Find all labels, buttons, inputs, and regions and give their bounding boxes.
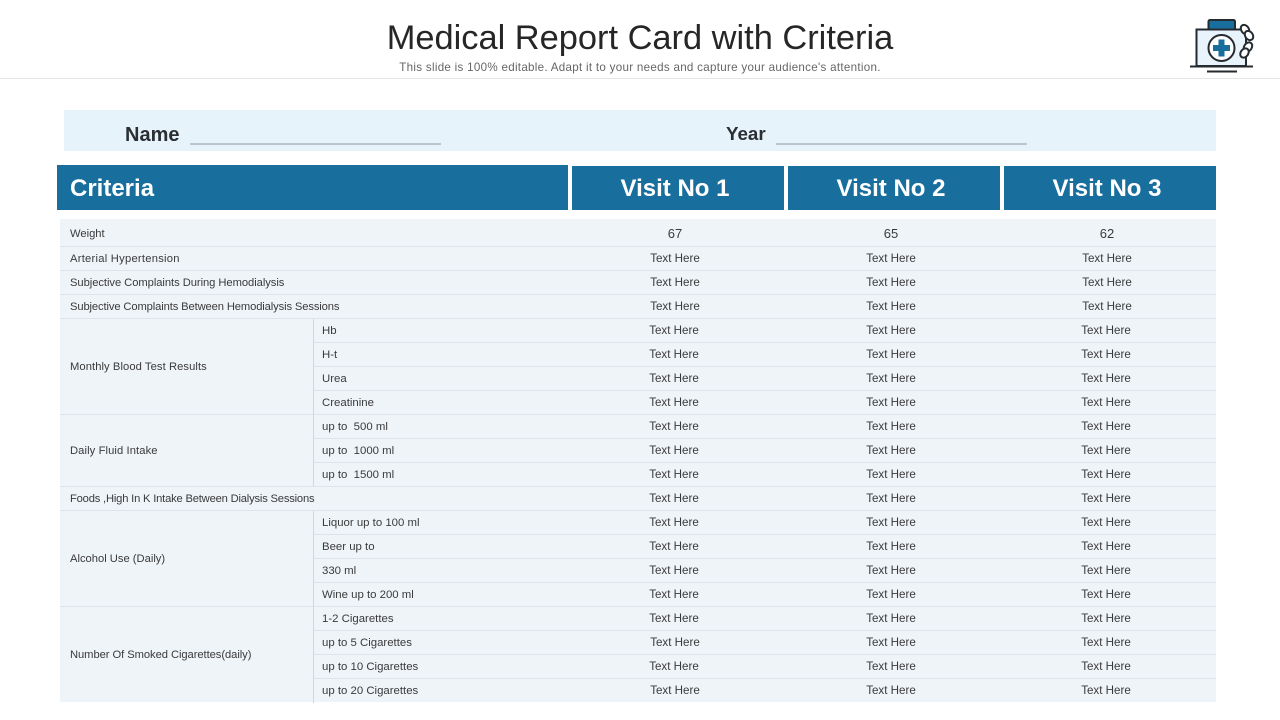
- row: wine: [314, 583, 1216, 607]
- row: liquor: Liquor up to 100 ml: [322, 517, 420, 529]
- row: up to 500 ml: Text Here: [649, 420, 699, 433]
- group label: daily fluid intake: [60, 415, 314, 487]
- criteria table: [60, 219, 1216, 702]
- row: foods high in k: Text Here: [1081, 492, 1131, 505]
- row: weight: [60, 219, 1216, 247]
- row: up to 10 cigarettes: [314, 655, 1216, 679]
- header: visit no 1: [572, 166, 784, 210]
- row: 330 ml: Text Here: [866, 564, 916, 577]
- year label: Year: [726, 123, 766, 144]
- row: arterial hypertension: Text Here: [1082, 252, 1132, 265]
- row: h-t: H-t: [322, 349, 337, 361]
- row: up to 500 ml: up to 500 ml: [322, 421, 388, 433]
- row: up to 500 ml: [314, 415, 1216, 439]
- subtitle: This slide is 100% editable. Adapt it to your needs and capture your audience's attention.: [399, 61, 881, 74]
- group label: monthly blood test results: [60, 319, 314, 415]
- row: up to 20 cigarettes: [322, 684, 1131, 697]
- row: up to 1500 ml: [314, 463, 1216, 487]
- header: criteria: [57, 165, 568, 210]
- row: up to 5 cigarettes: Text Here: [650, 636, 700, 649]
- row: complaints during hemodialysis: Text Here: [866, 276, 916, 289]
- row: foods high in k: [60, 487, 1216, 511]
- row: 330 ml: Text Here: [1081, 564, 1131, 577]
- year input line: [776, 143, 1027, 145]
- row: 1-2 cigarettes: [314, 607, 1216, 631]
- header: visit no 1: Visit No 1: [621, 175, 729, 202]
- row: complaints between sessions: Subjective Complaints Between Hemodialysis Sessions: [70, 301, 339, 313]
- header: visit no 2: [788, 166, 1000, 210]
- row: up to 1000 ml: Text Here: [649, 444, 699, 457]
- row: wine: Text Here: [866, 588, 916, 601]
- row: weight: 62: [1100, 226, 1114, 241]
- row: creatinine: [314, 391, 1216, 415]
- row: 1-2 cigarettes: 1-2 Cigarettes: [322, 613, 394, 625]
- row: creatinine: Text Here: [649, 396, 699, 409]
- row: complaints between sessions: [60, 295, 1216, 319]
- row: urea: Urea: [322, 373, 347, 385]
- group label: smoked cigarettes: [60, 607, 314, 703]
- row: up to 20 cigarettes: Text Here: [1081, 684, 1131, 697]
- row: up to 5 cigarettes: up to 5 Cigarettes: [322, 637, 412, 649]
- row: up to 1500 ml: Text Here: [649, 468, 699, 481]
- row: up to 5 cigarettes: Text Here: [866, 636, 916, 649]
- row: hb: Text Here: [866, 324, 916, 337]
- group label: smoked cigarettes: Number Of Smoked Cigarettes(daily): [70, 649, 251, 661]
- row: beer: Text Here: [866, 540, 916, 553]
- row: creatinine: Text Here: [866, 396, 916, 409]
- row: liquor: [314, 511, 1216, 535]
- row: up to 1500 ml: Text Here: [1081, 468, 1131, 481]
- row: up to 1500 ml: Text Here: [866, 468, 916, 481]
- header: criteria: Criteria: [70, 175, 154, 202]
- row: 330 ml: Text Here: [649, 564, 699, 577]
- row: weight: 67: [668, 226, 682, 241]
- row: hb: Text Here: [649, 324, 699, 337]
- row: foods high in k: Text Here: [649, 492, 699, 505]
- row: up to 20 cigarettes: Text Here: [866, 684, 916, 697]
- row: up to 500 ml: Text Here: [866, 420, 916, 433]
- row: complaints between sessions: Text Here: [866, 300, 916, 313]
- header: visit no 3: Visit No 3: [1053, 175, 1161, 202]
- row: weight: Weight: [70, 228, 105, 240]
- row: up to 10 cigarettes: Text Here: [649, 660, 699, 673]
- row: urea: Text Here: [866, 372, 916, 385]
- row: up to 1000 ml: up to 1000 ml: [322, 445, 394, 457]
- row: 1-2 cigarettes: Text Here: [1081, 612, 1131, 625]
- row: h-t: Text Here: [649, 348, 699, 361]
- row: urea: Text Here: [649, 372, 699, 385]
- row: beer: Beer up to: [322, 541, 375, 553]
- row: arterial hypertension: [60, 247, 1216, 271]
- row: beer: Text Here: [1081, 540, 1131, 553]
- row: wine: Text Here: [1081, 588, 1131, 601]
- group label: alcohol use: [60, 511, 314, 607]
- row: up to 1000 ml: [314, 439, 1216, 463]
- row: h-t: Text Here: [866, 348, 916, 361]
- row: up to 20 cigarettes: up to 20 Cigarettes: [322, 685, 418, 697]
- row: up to 1000 ml: Text Here: [866, 444, 916, 457]
- row: arterial hypertension: Text Here: [866, 252, 916, 265]
- row: complaints during hemodialysis: Text Here: [650, 276, 700, 289]
- row: weight: 65: [884, 226, 898, 241]
- row: up to 10 cigarettes: up to 10 Cigarettes: [322, 661, 418, 673]
- row: hb: Hb: [322, 325, 337, 337]
- row: h-t: Text Here: [1081, 348, 1131, 361]
- row: up to 1500 ml: up to 1500 ml: [322, 469, 394, 481]
- row: urea: Text Here: [1081, 372, 1131, 385]
- row: liquor: Text Here: [1081, 516, 1131, 529]
- row: 1-2 cigarettes: Text Here: [866, 612, 916, 625]
- group label: alcohol use: Alcohol Use (Daily): [70, 553, 165, 565]
- group label: monthly blood test results: Monthly Blood Test Results: [70, 361, 207, 373]
- name input line: [190, 143, 441, 145]
- row: hb: [314, 319, 1216, 343]
- row: complaints during hemodialysis: Subjective Complaints During Hemodialysis: [70, 277, 284, 289]
- row: beer: [314, 535, 1216, 559]
- row: arterial hypertension: Arterial Hypertension: [70, 253, 180, 265]
- row: up to 500 ml: Text Here: [1081, 420, 1131, 433]
- name and year band: [64, 110, 1216, 151]
- row: up to 1000 ml: Text Here: [1081, 444, 1131, 457]
- row: h-t: [314, 343, 1216, 367]
- icon: medical case: [1190, 19, 1254, 72]
- row: liquor: Text Here: [649, 516, 699, 529]
- row: wine: Wine up to 200 ml: [322, 589, 414, 601]
- row: foods high in k: Text Here: [866, 492, 916, 505]
- row: complaints between sessions: Text Here: [1082, 300, 1132, 313]
- row: creatinine: Text Here: [1081, 396, 1131, 409]
- row: up to 10 cigarettes: Text Here: [866, 660, 916, 673]
- header: visit no 2: Visit No 2: [837, 175, 945, 202]
- row: creatinine: Creatinine: [322, 397, 374, 409]
- row: 330 ml: 330 ml: [322, 565, 356, 577]
- row: beer: Text Here: [649, 540, 699, 553]
- row: complaints during hemodialysis: [60, 271, 1216, 295]
- group label: daily fluid intake: Daily Fluid Intake: [70, 445, 158, 457]
- row: complaints between sessions: Text Here: [650, 300, 700, 313]
- row: urea: [314, 367, 1216, 391]
- header: visit no 3: [1004, 166, 1216, 210]
- row: complaints during hemodialysis: Text Here: [1082, 276, 1132, 289]
- row: foods high in k: Foods ,High In K Intake Between Dialysis Sessions: [70, 493, 314, 505]
- row: arterial hypertension: Text Here: [650, 252, 700, 265]
- row: liquor: Text Here: [866, 516, 916, 529]
- row: up to 10 cigarettes: Text Here: [1081, 660, 1131, 673]
- name label: Name: [125, 124, 179, 146]
- row: up to 5 cigarettes: Text Here: [1081, 636, 1131, 649]
- row: 1-2 cigarettes: Text Here: [649, 612, 699, 625]
- row: up to 20 cigarettes: Text Here: [650, 684, 700, 697]
- row: 330 ml: [314, 559, 1216, 583]
- row: wine: Text Here: [649, 588, 699, 601]
- title: Medical Report Card with Criteria: [387, 19, 893, 57]
- row: up to 5 cigarettes: [314, 631, 1216, 655]
- row: hb: Text Here: [1081, 324, 1131, 337]
